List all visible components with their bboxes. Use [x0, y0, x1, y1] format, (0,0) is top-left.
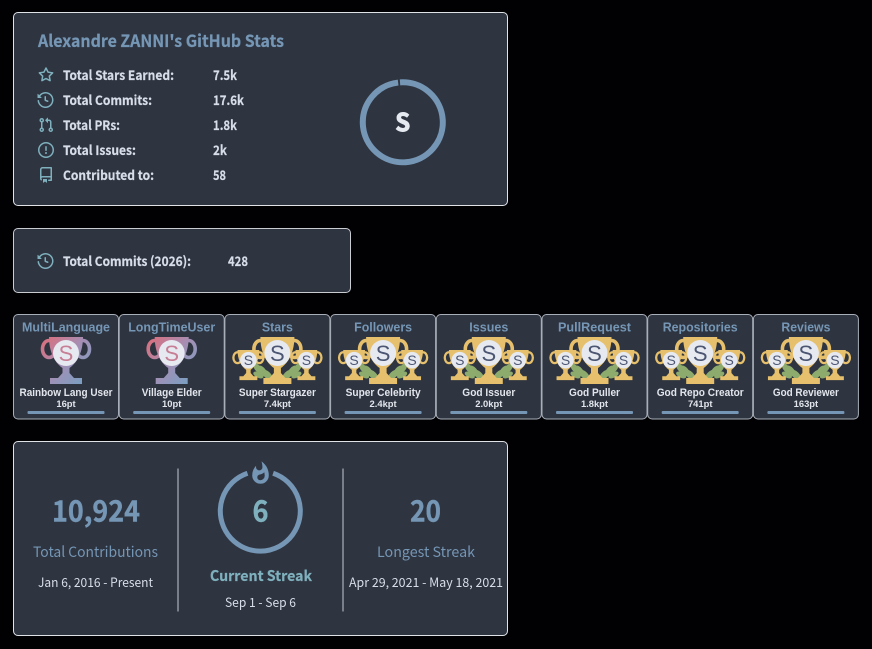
trophy: MultiLanguage: Rainbow Lang User	[20, 387, 112, 399]
trophy: LongTimeUser: LongTimeUser	[128, 320, 215, 334]
trophy: Reviews: S	[830, 352, 840, 368]
longest streak: Apr 29, 2021 - May 18, 2021	[349, 572, 503, 591]
trophy: Stars: Stars	[262, 320, 293, 334]
value: 428: 428	[228, 251, 248, 270]
longest streak: Longest Streak	[377, 541, 475, 562]
stat: stars: Total Stars Earned:	[63, 65, 174, 84]
current streak: Current Streak	[210, 565, 312, 586]
stat: commits: Total Commits:	[63, 90, 152, 109]
current streak: Sep 1 - Sep 6	[225, 592, 296, 611]
stat: issues: 2k	[213, 140, 227, 159]
trophy: Issues: S	[513, 352, 522, 368]
trophy: Reviews: S	[772, 352, 782, 368]
trophy: Repositories: S	[693, 341, 708, 366]
trophy: PullRequest: S	[619, 352, 628, 368]
trophy: Issues: 2.0kpt	[475, 398, 502, 409]
trophy: LongTimeUser: S	[164, 341, 179, 366]
stat: stars: 7.5k	[213, 65, 237, 84]
trophy: Reviews	[753, 314, 858, 419]
trophy: MultiLanguage: MultiLanguage	[22, 320, 110, 334]
trophy: Followers: Super Celebrity	[346, 387, 421, 399]
stat: issues: Total Issues:	[63, 140, 136, 159]
stat: pull requests	[39, 115, 237, 134]
trophy: PullRequest: PullRequest	[558, 320, 632, 334]
trophy: Repositories: God Repo Creator	[657, 387, 744, 399]
trophy: PullRequest: S	[587, 341, 602, 366]
trophy: Repositories: S	[725, 352, 734, 368]
current streak	[210, 462, 312, 611]
panel: trophies row	[14, 314, 858, 419]
trophy: PullRequest: God Puller	[569, 387, 620, 399]
trophy: Issues: Issues	[469, 320, 508, 334]
trophy: Repositories: Repositories	[663, 320, 738, 334]
trophy: Reviews: S	[799, 341, 813, 366]
trophy: PullRequest: S	[561, 352, 570, 368]
trophy: Repositories	[648, 314, 753, 419]
total contributions	[33, 488, 158, 591]
trophy: MultiLanguage: S	[59, 341, 73, 366]
trophy: Stars: S	[244, 352, 253, 368]
panel: streak stats card	[14, 442, 508, 636]
trophy: Followers: 2.4kpt	[370, 398, 397, 409]
trophy: Reviews: God Reviewer	[773, 387, 839, 399]
trophy: LongTimeUser	[119, 314, 224, 419]
panel: yearly commits card	[14, 228, 350, 292]
trophy: PullRequest: 1.8kpt	[581, 398, 608, 409]
stat: contributed to: Contributed to:	[63, 165, 154, 184]
trophy: Stars: S	[270, 341, 285, 366]
total contributions: 10,924	[52, 488, 140, 530]
panel: GitHub stats card	[14, 12, 508, 206]
trophy: Followers: S	[407, 352, 417, 368]
trophy: Followers: S	[376, 341, 390, 366]
trophy: Repositories: 741pt	[688, 398, 712, 409]
title: Alexandre ZANNI's GitHub Stats	[37, 28, 284, 52]
trophy: Stars: S	[302, 352, 311, 368]
icon: commit history	[38, 253, 54, 269]
stat: contributed to	[40, 165, 226, 184]
trophy: LongTimeUser: Village Elder	[142, 387, 202, 399]
total contributions: Total Contributions	[33, 541, 158, 562]
trophy: Reviews: Reviews	[781, 320, 830, 334]
trophy: Stars	[225, 314, 330, 419]
stat: pull requests: 1.8k	[213, 115, 237, 134]
current streak: 6	[252, 488, 268, 530]
trophy: Stars: 7.4kpt	[264, 398, 291, 409]
trophy: PullRequest	[542, 314, 647, 419]
stat: pull requests: Total PRs:	[63, 115, 120, 134]
trophy: Stars: Super Stargazer	[239, 387, 316, 399]
rank ring: S	[395, 103, 410, 138]
trophy: MultiLanguage: 16pt	[56, 398, 76, 409]
stat: commits	[38, 90, 244, 109]
stat: contributed to: 58	[213, 165, 226, 184]
longest streak: 20	[410, 488, 441, 530]
trophy: Issues: S	[455, 352, 464, 368]
stat: commits: 17.6k	[213, 90, 244, 109]
trophy: Followers: S	[349, 352, 359, 368]
rank ring	[360, 80, 445, 165]
label: total commits 2026: Total Commits (2026):	[63, 251, 191, 270]
icon: flame	[252, 462, 268, 484]
total contributions: Jan 6, 2016 - Present	[38, 572, 153, 591]
trophy: Followers	[331, 314, 436, 419]
trophy: Issues: S	[481, 341, 496, 366]
trophy: Followers: Followers	[354, 320, 412, 334]
trophy: Repositories: S	[667, 352, 676, 368]
longest streak	[349, 488, 503, 591]
trophy: Issues: God Issuer	[462, 387, 515, 399]
trophy: Reviews: 163pt	[794, 398, 818, 409]
stat: stars	[39, 65, 237, 84]
trophy: LongTimeUser: 10pt	[162, 398, 181, 409]
stat: issues	[38, 140, 227, 159]
trophy: MultiLanguage	[14, 314, 118, 419]
trophy: Issues	[436, 314, 541, 419]
